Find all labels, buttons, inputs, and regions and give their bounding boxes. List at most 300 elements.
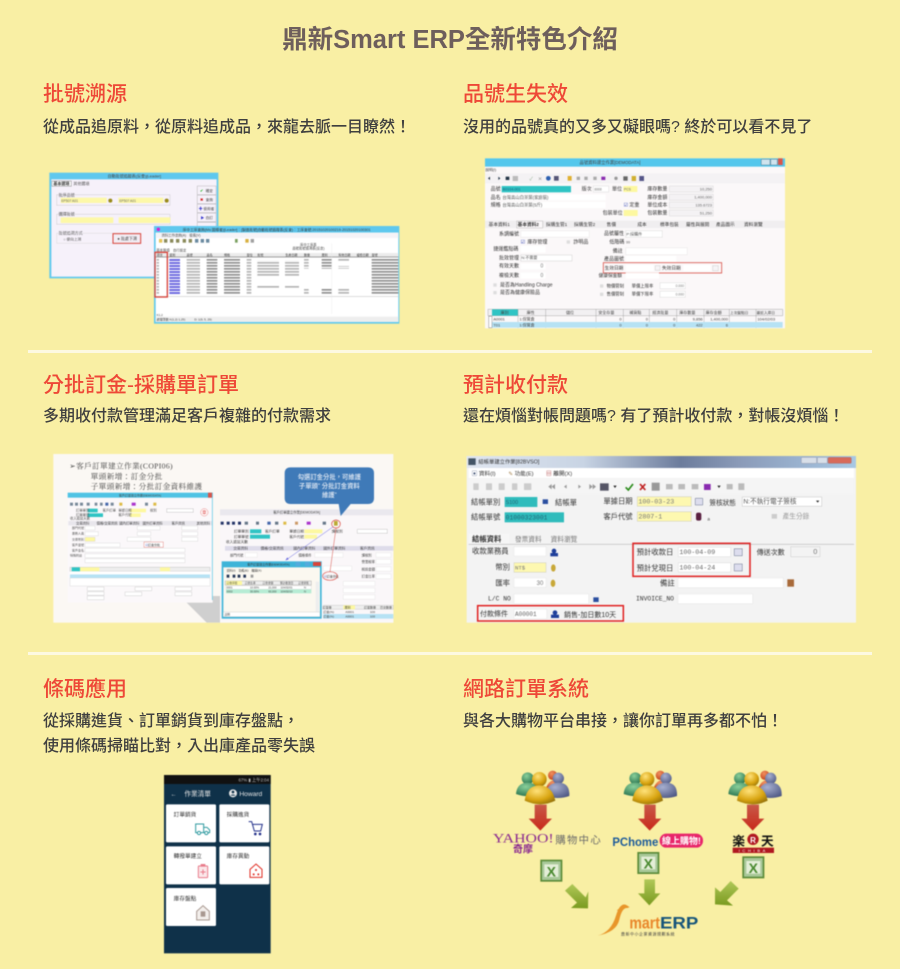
screenshot: item master window [484,158,786,329]
table rows [157,259,398,295]
header fields: 簽核狀態 [709,498,736,507]
window: trace results: 處理筆數 K(1,2) 1,25) D: 1(9, 5, 29) [157,316,212,321]
window: trace query: 基本選項 [53,180,69,186]
left order window [68,492,220,623]
screenshot: item master window: 詐明品 [573,238,588,245]
logo: Yahoo 購物中心 [493,832,601,856]
window: trace results: 資料工作查詢(A) 檢索(V) [162,232,200,237]
header fields: 結帳單別 [471,498,500,507]
body fields: A00001 [515,611,537,618]
body fields: 0 [813,547,817,556]
header fields: 客戶代號 [603,512,633,521]
logo: PChome [612,834,703,849]
right order window: 價格條件 [298,552,312,557]
right order window: 庫別 [345,605,351,610]
left order window: 交易幣別 [72,536,84,541]
tabs: 資料瀏覽 [551,535,578,544]
popup window: 預計收款日 [280,581,294,585]
card: 採購進貨: 採購進貨 [227,810,250,818]
window: trace results: 品號批號追溯表(反查) [292,245,325,250]
left order window: 收入遞延天數 [70,516,91,521]
body fields: 幣別 [495,563,510,572]
logo: SmartERP [598,905,698,936]
fields: 10,250 [700,186,713,191]
table: 上次盤點日 [730,310,749,315]
logo: Yahoo 購物中心: 奇摩 [513,843,533,856]
window: trace query: ✚ [199,205,203,211]
heading: 批號溯源: 批號溯源 [43,83,127,106]
screenshot: item master window: 物價管制 [607,282,625,289]
fields: 0000 [594,187,602,191]
table: 0 [646,316,649,321]
window: trace query: 批序品號 [59,191,75,197]
window: trace results: 序中工序表 [300,242,317,247]
table [488,309,783,328]
window: trace query: 自動批號追蹤表(反查)[Leader] [108,173,161,179]
right order window: 課稅別 [332,529,343,534]
window: trace results: 複檢日期 [357,252,369,257]
text: 條碼應用 description: 使用條碼掃瞄比對，入出庫產品零失誤 [43,738,315,755]
right order window: 訂金(%) [323,614,334,619]
window: trace query: 確定 [206,188,213,193]
tabs: 成本 [637,221,647,228]
body fields: 100-04-24 [679,563,715,571]
fields: 品號 [491,186,501,193]
right order window [220,509,393,623]
fields: 包裝單位 [603,209,623,216]
screenshot: item master window: 0.000 [676,293,684,297]
window: trace query: 批號追溯方式 [59,230,83,236]
header fields: 結帳單號 [471,513,501,522]
tabs [469,533,854,545]
fields: ☑ [624,202,629,208]
heading: 條碼應用: 條碼應用 [43,678,127,701]
left order window: 章 [202,509,207,516]
tabs: 售價 [607,221,616,228]
table: 9,856 [693,316,703,321]
screenshot: item master window: 失效日期 [662,264,681,271]
fields: 定重 [629,201,639,208]
left order window: ☑訂金分批 [145,542,160,547]
window: trace query: ✖ [200,197,204,202]
screenshot: item master window: 庫存管理 [527,238,547,245]
window: trace results: 單位 [247,252,253,257]
logo: SmartERP: ERP [660,914,698,933]
header fields: S100 [506,500,518,506]
window: trace results: 規格 [224,252,230,257]
popup window: 訂金金額 [263,581,274,585]
window: trace results: 批號 [257,252,263,257]
tabs [485,221,785,228]
left order window: 交易資料 [76,521,90,526]
logo: Yahoo 購物中心: 購物中心 [555,834,601,847]
body fields: L/C NO [488,596,511,603]
left order window: 客戶訂單 [103,508,117,513]
left order window: 國外訂單資料 [143,521,163,526]
screenshot: settlement window: 結帳單建立作業[82BVSO] [478,458,540,466]
header fields: N:不執行電子簽核 [743,497,797,506]
fields: 台灣高山白茶葉(5斤) [502,202,543,209]
table: 儲位 [566,309,574,315]
left order window: 價格/交易資訊 [97,521,118,526]
table: 經濟批量 [652,309,668,315]
right order window: 營業稅率 [362,559,376,564]
tabs: 產品圖示 [716,221,735,228]
screenshot: item master window: 0 [541,264,544,270]
table: 0 [619,322,622,327]
text: 批號溯源 description: 從成品追原料，從原料追成品，來龍去脈一目瞭然！ [43,119,411,136]
window: trace query: 查詢 [206,197,213,202]
logo: Rakuten: ICHIBA [739,848,768,853]
table: 0 [673,322,676,327]
window: trace results: 單別 [169,252,175,257]
logo: Rakuten: 楽 [732,833,745,848]
popup window: 0001 [227,585,233,589]
logo: Yahoo 購物中心: YAHOO! [493,832,554,846]
window: trace query: 使用者 [203,206,215,211]
right order window: 訂單單號 [234,534,249,539]
people icons [516,771,782,804]
screenshot: item master window: 售價管制 [607,291,625,298]
logo: SmartERP: 鼎新中小企業資源規劃系統 [621,930,675,936]
fields: 庫存數量 [647,186,667,193]
right order window: 訂金比率 [362,574,376,579]
right order window: 訂單量 [323,605,332,610]
body fields: 預計兌現日 [637,563,673,572]
diagram: online order flow [492,770,782,937]
excel icons [540,852,764,882]
card: 庫存盤點 [166,888,216,926]
callout bubble: 子單頭” 分批訂金資料 [299,481,360,490]
toolbar: ✕ [538,177,542,183]
card: 轉撥單建立 [166,846,216,884]
right order window: 收入遞延天數 [226,539,248,544]
logo: Rakuten [732,833,774,853]
popup window: 訂金序號 [227,581,238,585]
right order window: 100 [370,610,375,614]
body fields: 預計收款日 [637,548,673,557]
logo: Rakuten: 天 [761,834,774,848]
table: T01 [493,322,501,327]
window: trace query: 選擇批號 [59,210,75,216]
window: trace query [49,173,218,278]
popup window: 30.00% [250,589,260,593]
right order window: 訂單單別 [234,529,249,534]
card: 轉撥單建立: 轉撥單建立 [174,852,202,860]
toolbar [473,483,744,491]
table: 1,400,000 [710,316,729,321]
window: trace results: K1,2 [157,313,163,317]
callout bubble [285,467,374,516]
window: trace results: 品號 [187,252,193,257]
popup window: 說明 [225,613,230,617]
screenshot: item master window: 捷運鑑點碼 [493,246,518,253]
screenshot: item master window: 單價下限率 [632,291,654,298]
right order window: 已交數量 [380,605,392,610]
popup window: N [304,585,306,589]
window: trace query: ● 批處下溯 [117,235,137,241]
logo: SmartERP: mart [629,914,660,933]
divider [28,652,872,655]
right order window: A0001 [345,615,354,619]
popup window: 客戶訂單建立作業[DEMODATA] [247,562,290,567]
screenshot: deposit order windows [52,454,394,624]
body fields: 100-04-09 [679,548,715,556]
right order window: 部門代號 [230,552,244,557]
table: 6 [726,322,729,327]
app bar: ← [171,792,177,798]
fields: 品名 [491,194,501,201]
green arrows [565,879,739,908]
left order window: 訂單單別 [76,508,90,513]
table: 庫存數量 [679,309,695,315]
screenshot: item master window: 0.000 [676,284,684,288]
header fields: 01000323001 [506,514,548,521]
caption text: 子單頭新增：分批訂金資料維護 [91,481,203,491]
popup window: 0002 [227,589,233,593]
header fields: 100-03-23 [638,497,674,505]
table: A0001 [493,316,506,321]
fields: 51,250 [700,210,713,215]
table: 庫存金額 [706,309,722,315]
tabs: 基本資料1 [489,221,510,228]
screenshot: settlement window: ▣ 資料(I) [472,469,496,477]
header fields: 2807-1 [638,513,662,521]
right order window: 100 [370,615,375,619]
window: trace query: 自訂 [206,215,213,220]
right order window: 客戶代號 [289,534,304,539]
right order window: 交易資料 [233,546,248,551]
caption text: 單頭新增：訂金分批 [91,471,163,481]
card: 庫存盤點: 庫存盤點 [174,894,197,902]
window: trace results: 庫別 [322,252,328,257]
left order window: 國內訂單資料 [119,521,140,526]
body fields: INVOICE_NO [636,596,674,603]
popup window [222,561,322,619]
screenshot: item master window: 備註 [613,247,623,254]
screenshot: item master window: P:採購件 [626,230,642,236]
screenshot: settlement window [466,455,856,624]
popup window: 63,000 [268,589,277,593]
popup window: N [304,589,306,593]
header fields: 結帳單 [555,498,577,507]
screenshot: item master window: 品號資料建立作業[DEMODATA] [580,159,640,166]
screenshot: item master window: 複檢天數 [499,272,519,279]
body fields: 收款業務員 [472,547,509,556]
left order window: 客戶全名 [72,547,84,552]
logo: PChome: 線上購物! [662,835,701,846]
header fields: 產生分錄 [783,511,810,520]
screenshot: item master window: 產品圖號 [604,255,624,262]
callout bubble: 維護” [322,490,337,499]
screenshot: batch tracing windows [48,172,400,324]
title: 鼎新Smart ERP全新特色介紹 [282,26,618,54]
text: 條碼應用 description [43,712,315,755]
tabs: 結帳資料 [472,535,502,544]
toolbar [485,173,785,183]
text: 條碼應用 description: 從採購進貨、訂單銷貨到庫存盤點， [43,713,299,730]
screenshot: item master window: 品號屬性 [604,230,624,237]
right order window: 訂單數量 [364,605,376,610]
body fields: 匯率 [495,578,510,587]
tabs: 基本資料2 [518,221,539,228]
window: trace query: ▶ [201,215,205,220]
screenshot: item master window: 生效日期 [605,264,624,271]
screenshot: item master window: 99 [626,240,630,244]
card: 庫存異動: 庫存異動 [227,852,250,860]
card: 庫存異動 [219,846,269,884]
popup window: 資料(I) 功能(E) 離開(X) [227,567,262,572]
caption text [69,460,203,491]
window: trace query: ✔ [200,188,203,193]
table: 0 [619,316,622,321]
left order window: 業務人員 [72,531,84,536]
left order window: 部門代號 [72,525,84,530]
popup window: 104/02/01 [281,585,293,589]
left order window: 客戶資訊 [172,521,186,526]
window: trace results: 有效日期 [338,252,350,257]
table: 最近入庫日 [757,310,775,315]
right order window: 課稅別 [362,552,372,557]
header fields: a [707,516,710,521]
screenshot: item master window: 是否為Handling Charge [500,281,553,288]
screenshot: settlement window: ✎ 功能(E) [508,469,534,477]
table: 104/02/03 [757,316,776,321]
tabs: 標準包裝 [660,221,679,228]
popup window: 訂金比率 [245,581,256,585]
window: trace query: EP507 A01 [119,199,136,203]
tabs: 採購生管1 [546,221,568,228]
body fields: 銷售-加日數10天 [564,610,616,619]
table: 0 [673,316,676,321]
caption text: ➢客戶訂單建立作業(COPI06) [69,460,173,470]
screenshot: item master window: 0 [541,273,544,279]
callout bubble: 勾選訂金分批，可維護 [298,472,362,481]
right order window: 稅前金額 [362,566,376,571]
body fields: 付款條件 [480,609,508,618]
popup window: 訂金狀態 [298,581,309,585]
heading: 品號生失效: 品號生失效 [463,83,568,106]
tabs: 屬性與展開 [686,221,710,228]
table: 0 [646,322,649,327]
left order window: 客戶代號 [118,512,132,517]
right order window: 價格/交易資訊 [261,546,284,551]
fields: PCS [624,187,632,191]
fields: 版次 [582,186,592,193]
screenshot: item master window: 健康保金額 [599,272,622,279]
header fields [471,496,822,522]
right order window: ☑訂金分批 [324,574,339,579]
right order window: A0001 [345,610,354,614]
fields: 庫存金額 [647,194,667,201]
tabs: 發票資料 [515,535,542,544]
body fields: NT$ [515,564,526,571]
window: trace results: 項次 [157,252,163,257]
left order window: 稅別 [150,508,157,513]
tabs: 資料瀏覽 [744,221,763,228]
table: 補貨點 [629,309,641,315]
table: 庫性 [527,309,535,315]
popup window: 21,000 [268,585,277,589]
left order window: 其他資料 [197,521,211,526]
body fields [472,543,820,621]
window: trace results: 品名 [207,252,213,257]
heading: 網路訂單系統: 網路訂單系統 [463,678,589,701]
window: trace results: 單號 [372,252,378,257]
text: 品號生失效 description: 沒用的品號真的又多又礙眼嗎? 終於可以看不見了 [463,119,812,136]
fields: B0104-001 [503,188,521,192]
fields [491,186,713,216]
window: trace results: 數量 [304,252,310,257]
table: 庫別 [501,309,509,315]
screenshot: item master window: 系調編號 [499,231,519,238]
text: 網路訂單系統 description: 與各大購物平台串接，讓你訂單再多都不怕！ [463,713,783,730]
text: 分批訂金 description: 多期收付款管理滿足客戶複雜的付款需求 [43,408,331,425]
body fields: 30 [537,581,544,587]
tabs: 採購生管2 [574,221,596,228]
window: trace results: 生產日期 [285,252,297,257]
window: trace results: 基本選項 自行設定 [156,248,187,253]
fields: 135.6723 [695,202,713,207]
fields: 單位 [612,186,622,193]
screenshot: item master window: 單價上限率 [632,282,654,289]
header fields: 單據日期 [603,496,633,505]
screenshot: item master window: 有效天數 [499,263,519,270]
right order window: 單據日期 [289,529,304,534]
window: trace query: EP507 A01 [61,199,78,203]
table: 安全存量 [598,309,614,315]
table: 1:保質倉 [519,321,535,327]
screenshot: item master window: 說明(I) [485,167,496,172]
text: 預計收付款 description: 還在煩惱對帳問題嗎? 有了預計收付款，對帳沒煩惱！ [463,408,844,425]
fields: 單位成本 [647,201,667,208]
card: 採購進貨 [219,804,269,842]
phone app screen [163,774,272,954]
window: trace results [154,226,399,324]
right order window: 國外訂單資料 [323,546,346,551]
card: 訂單銷貨: 訂單銷貨 [174,810,197,818]
popup window: 10.00% [250,585,260,589]
phone app screen: 67% ▮ 上午2:04 [238,777,270,784]
fields: 1,400,000 [694,195,713,200]
fields: 包裝數量 [647,209,667,216]
right order window: 客戶訂單 [265,529,280,534]
app bar [171,789,263,798]
table: 422 [696,322,703,327]
logo: PChome: PChome [612,835,658,849]
toolbar: ✓ [529,177,533,183]
window: trace query: 其他選項 [73,180,89,186]
left order window: 客戶單號 [72,542,84,547]
fields: 台灣高山白茶葉(家庭裝) [502,194,549,201]
table: 1:保質倉 [519,315,535,321]
right order window: 訂金(%) [323,609,334,614]
card: 訂單銷貨 [166,804,216,842]
right order window: 客戶資訊 [360,546,375,551]
left order window: 客戶訂單建立作業[DEMODATA] [119,492,161,497]
logo: Rakuten: R [750,836,756,845]
app bar: Howard [239,791,263,798]
screenshot: settlement window: ▤ 離開(X) [546,469,572,477]
screenshot: item master window: ☑ [521,239,526,245]
heading: 預計收付款: 預計收付款 [463,374,568,397]
body fields: 備註 [660,578,675,587]
divider [28,350,872,353]
left order window: 特殊附註 [70,552,82,557]
fields: 規格 [491,202,501,209]
red arrows [529,805,764,831]
right order window: 客戶訂單建立作業[DEMODATA] [273,509,320,514]
